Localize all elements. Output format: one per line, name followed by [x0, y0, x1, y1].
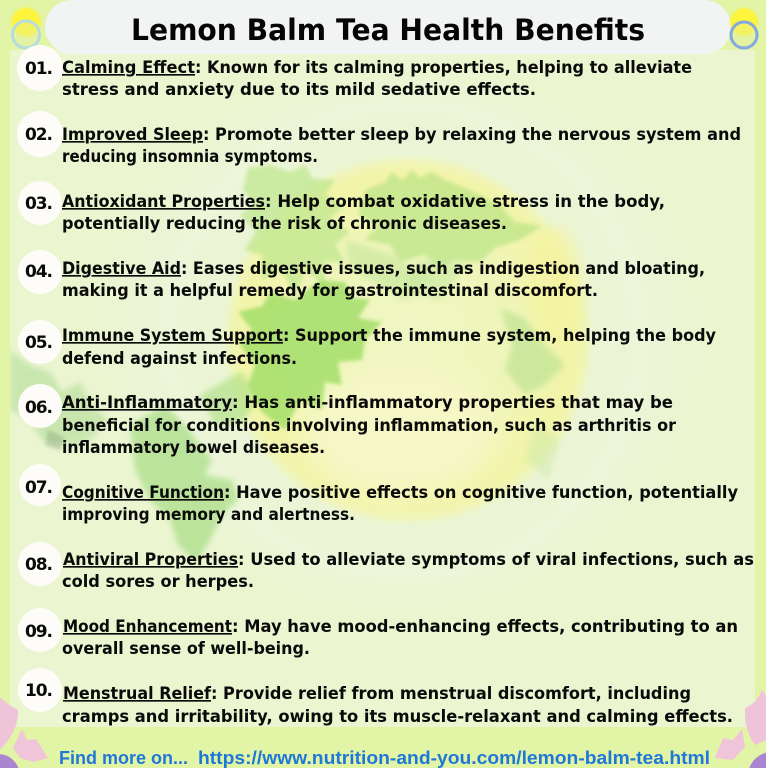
- item 02: 02.: [25, 125, 53, 145]
- leaf: top centre: [358, 170, 542, 270]
- title banner: [45, 0, 731, 54]
- item 03: 03.: [25, 194, 53, 214]
- item 02: reducing insomnia symptoms.: [62, 147, 318, 166]
- item 09: 09.: [25, 622, 53, 642]
- item 07: improving memory and alertness.: [62, 505, 355, 524]
- title: Lemon Balm Tea Health Benefits: [131, 13, 645, 47]
- item 06: : Has anti-inflammatory properties that may be: [232, 393, 673, 412]
- item 07: : Have positive effects on cognitive function, potentially: [224, 483, 738, 502]
- leaf: upper left: [240, 165, 350, 298]
- item 04: 04.: [25, 262, 53, 282]
- item 04: making it a helpful remedy for gastrointestinal discomfort.: [62, 281, 598, 300]
- item 06: inflammatory bowel diseases.: [62, 438, 325, 457]
- item 05: Immune System Support: [62, 326, 283, 345]
- item 05: 05.: [25, 333, 53, 353]
- item 03: potentially reducing the risk of chronic diseases.: [62, 214, 507, 233]
- item 10: [18, 668, 733, 726]
- item 01: 01.: [25, 59, 53, 79]
- item 10: : Provide relief from menstrual discomfort, including: [211, 684, 691, 703]
- item 06: 06.: [25, 398, 53, 418]
- item 01: [17, 45, 692, 99]
- item 04: Digestive Aid: [62, 259, 181, 278]
- item 01: Calming Effect: [62, 58, 195, 77]
- item 04: : Eases digestive issues, such as indigestion and bloating,: [181, 259, 705, 278]
- leaf: mid fragments: [345, 240, 430, 300]
- item 09: Mood Enhancement: [63, 617, 232, 636]
- leaf: lower left: [130, 405, 238, 563]
- item 10: Menstrual Relief: [63, 684, 212, 703]
- item 09: [18, 608, 738, 658]
- item 08: cold sores or herpes.: [62, 572, 254, 591]
- icon: bottom-right flower: [715, 690, 766, 768]
- item 01: : Known for its calming properties, helping to alleviate: [195, 58, 692, 77]
- item 06: Anti-Inflammatory: [62, 393, 232, 412]
- item 03: [18, 181, 665, 233]
- item 08: : Used to alleviate symptoms of viral infections, such as: [238, 550, 754, 569]
- item 02: : Promote better sleep by relaxing the nervous system and: [203, 125, 741, 144]
- footer link: Find more on...: [59, 748, 188, 768]
- item 02: [17, 111, 741, 166]
- item 05: : Support the immune system, helping the body: [283, 326, 716, 345]
- item 05: defend against infections.: [62, 349, 297, 368]
- item 06: beneficial for conditions involving inflammation, such as arthritis or: [62, 416, 677, 435]
- item 02: Improved Sleep: [62, 125, 203, 144]
- item 06: [18, 384, 677, 457]
- item 05: [18, 320, 716, 368]
- item 07: Cognitive Function: [62, 483, 224, 502]
- item 09: : May have mood-enhancing effects, contributing to an: [232, 617, 738, 636]
- item 04: [18, 250, 705, 300]
- leaf: right: [500, 308, 565, 395]
- item 10: cramps and irritability, owing to its muscle-relaxant and calming effects.: [62, 707, 733, 726]
- leaf: centre: [238, 280, 382, 430]
- footer link: https://www.nutrition-and-you.com/lemon-balm-tea.html: [198, 748, 710, 768]
- item 08: 08.: [25, 555, 53, 575]
- item 08: Antiviral Properties: [63, 550, 238, 569]
- icon: bottom-left flower: [0, 697, 48, 768]
- item 07: 07.: [25, 478, 53, 498]
- item 03: Antioxidant Properties: [62, 192, 265, 211]
- item 09: overall sense of well-being.: [62, 639, 310, 658]
- item 08: [18, 542, 754, 591]
- item 10: 10.: [25, 681, 53, 701]
- leaf: left far: [10, 350, 108, 445]
- item 01: stress and anxiety due to its mild sedative effects.: [62, 80, 536, 99]
- item 03: : Help combat oxidative stress in the body,: [265, 192, 665, 211]
- icon: top-right yellow dot and ring: [730, 8, 758, 48]
- item 07: [19, 464, 738, 524]
- icon: top-left yellow dot and ring: [12, 8, 40, 48]
